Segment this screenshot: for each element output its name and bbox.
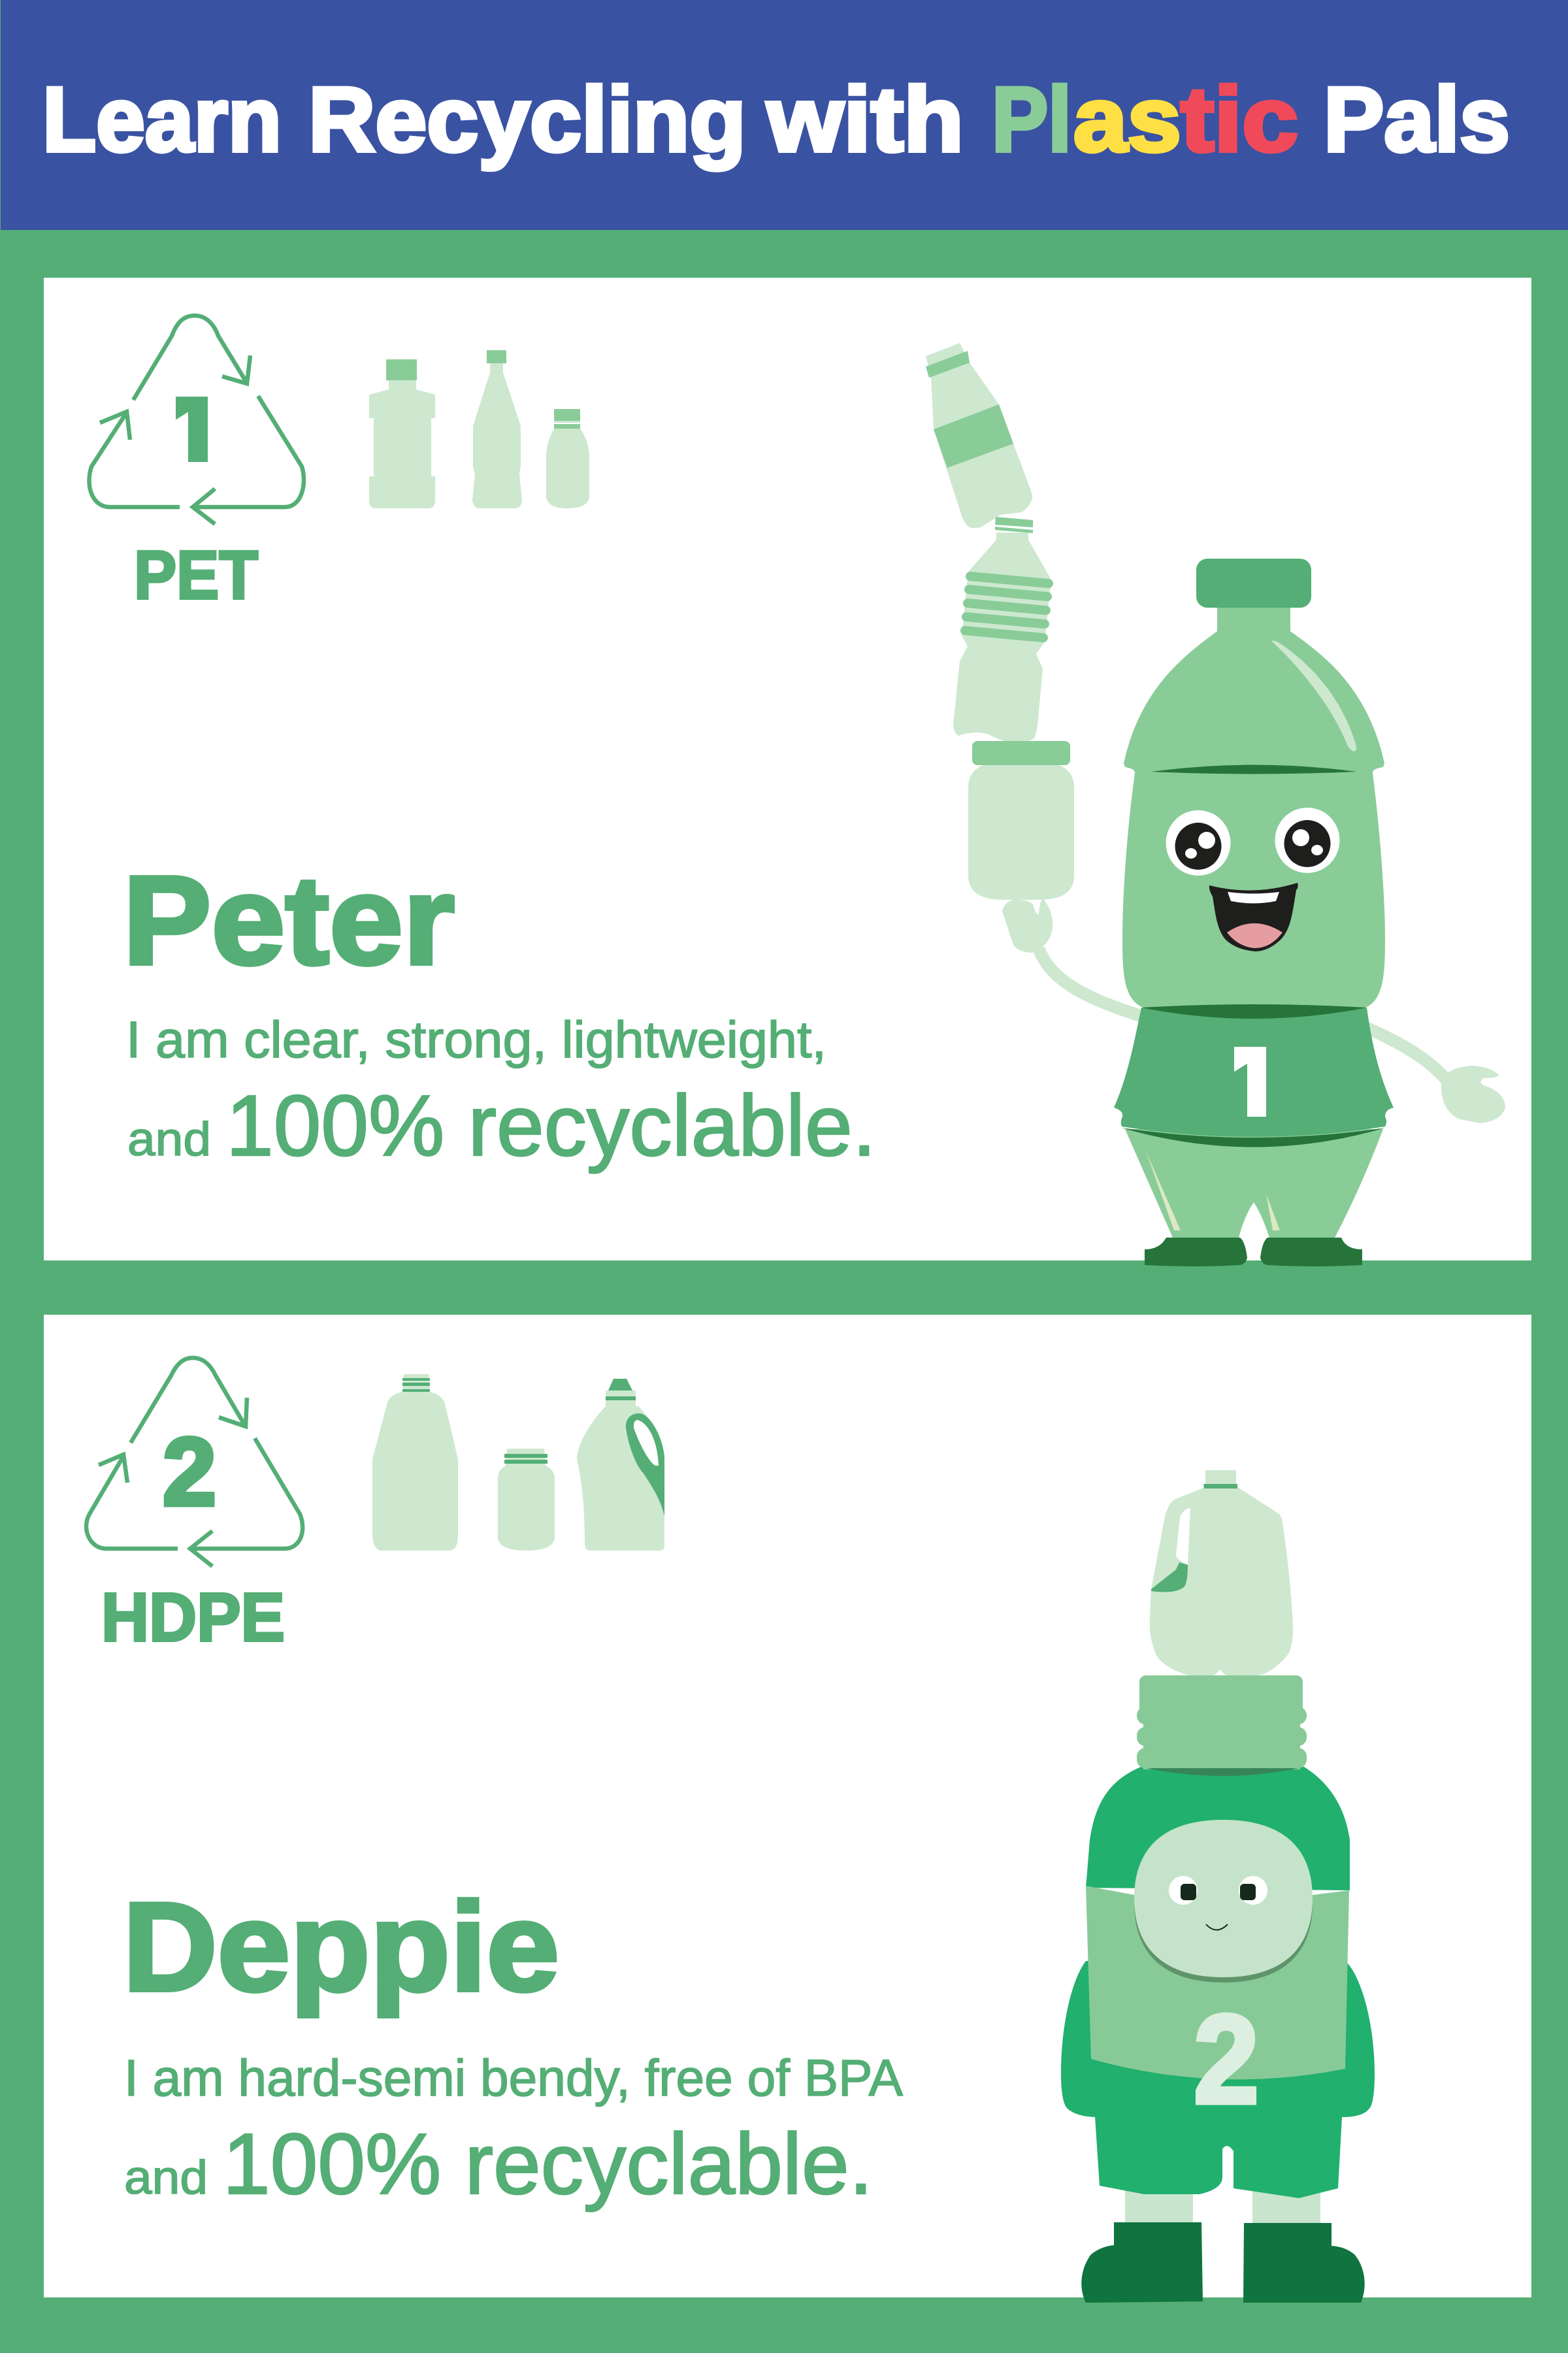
illustration: ribbed bottle in the stack xyxy=(953,517,1051,742)
pants xyxy=(1125,1129,1383,1238)
label: PET: PET xyxy=(134,537,258,614)
title: Recycling xyxy=(308,68,746,171)
text: and: and xyxy=(127,1113,211,1166)
character: Peter xyxy=(1002,559,1505,1266)
bottle highlight xyxy=(1271,640,1356,751)
text: description: I am hard-semi bendy, free of BPA xyxy=(124,2049,903,2107)
icon: recycling symbol 1: 1 xyxy=(169,376,221,482)
bottle cap xyxy=(1196,559,1311,608)
mouth xyxy=(1209,883,1298,951)
arms xyxy=(1061,1961,1375,2117)
eyes xyxy=(1166,808,1339,876)
text: 100% recyclable: 100% recyclable. xyxy=(226,1078,876,1174)
left arm and hand xyxy=(1002,900,1143,1017)
title: Pl xyxy=(992,68,1071,171)
icon: recycling symbol 2: 2 xyxy=(163,1419,216,1526)
illustration: milk jug on Deppie's head xyxy=(1150,1470,1293,1681)
illustration: tilted bottle on top of the stack xyxy=(926,343,1032,528)
character: Deppie xyxy=(1061,1675,1375,2303)
text: 100% recyclable: 100% recyclable. xyxy=(223,2116,873,2212)
bottle body xyxy=(1122,608,1385,1008)
shoes xyxy=(1145,1238,1362,1266)
shirt band xyxy=(1086,1886,1349,2079)
shirt number 2: 2 xyxy=(1194,1988,1259,2130)
boots xyxy=(1081,2222,1365,2303)
title: tic xyxy=(1181,68,1298,171)
illustration: jar balanced on hand xyxy=(968,741,1074,900)
right arm and hand xyxy=(1362,1026,1505,1123)
title: with xyxy=(766,68,964,171)
collar crease xyxy=(1151,765,1357,774)
icon: three PET containers xyxy=(369,350,589,508)
text: name Deppie: Deppie xyxy=(123,1876,559,2017)
label: HDPE: HDPE xyxy=(101,1579,285,1656)
text: and: and xyxy=(124,2152,208,2204)
shirt xyxy=(1114,1004,1394,1147)
icon: three HDPE containers xyxy=(372,1374,664,1551)
shirt number 1: 1 xyxy=(1226,1025,1282,1138)
shorts xyxy=(1091,2058,1345,2198)
panel: Deppie the HDPE bottle xyxy=(44,1315,1531,2303)
torso xyxy=(1086,1767,1350,1890)
text: name Peter: Peter xyxy=(123,849,455,991)
face xyxy=(1134,1820,1313,1983)
title: as xyxy=(1073,68,1181,171)
title xyxy=(42,68,1510,171)
head neck ridges xyxy=(1137,1675,1307,1776)
panel: Peter the PET bottle xyxy=(44,278,1531,1266)
title: Pals xyxy=(1324,68,1510,171)
icon: recycling symbol 1 xyxy=(89,316,304,524)
text: description: I am clear, strong, lightweight, xyxy=(126,1010,826,1068)
legs xyxy=(1125,2189,1320,2225)
shirt number 1 xyxy=(1234,1047,1266,1117)
header banner xyxy=(1,0,1568,230)
icon: recycling symbol 2 xyxy=(86,1358,302,1566)
title: Learn xyxy=(42,68,282,171)
